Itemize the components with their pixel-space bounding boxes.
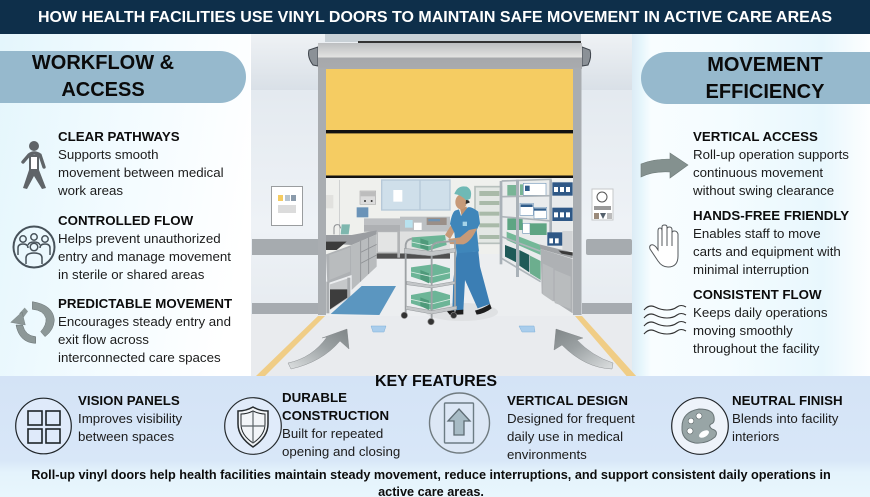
left floor arrow (288, 329, 349, 369)
item: controlled flow: Helps prevent unauthorized (58, 231, 221, 246)
item: vertical access: without swing clearance (693, 183, 834, 198)
item: predictable movement (58, 296, 232, 365)
item: clear pathways (58, 129, 224, 198)
panel: right movement efficiency (632, 34, 870, 376)
item: vertical access (693, 129, 849, 198)
title bar: HOW HEALTH FACILITIES USE VINYL DOORS TO MAINTAIN SAFE MOVEMENT IN ACTIVE CARE AREAS (38, 9, 832, 26)
feature: durable construction: DURABLE (282, 390, 347, 405)
icon: curved right arrow (640, 152, 688, 178)
closing statement (31, 468, 831, 497)
item: consistent flow: CONSISTENT FLOW (693, 287, 822, 302)
feature: neutral finish: NEUTRAL FINISH (732, 393, 843, 408)
icon: flow waves (644, 305, 686, 334)
supply cart with green boxes (401, 235, 457, 325)
title bar (0, 0, 870, 34)
floor shadow (426, 303, 498, 321)
item: predictable movement: PREDICTABLE MOVEMENT (58, 296, 232, 311)
heading: movement efficiency: EFFICIENCY (706, 81, 824, 103)
heading: key features: KEY FEATURES (375, 373, 497, 390)
item: consistent flow: Keeps daily operations (693, 305, 828, 320)
item: consistent flow (693, 287, 828, 356)
item: clear pathways: CLEAR PATHWAYS (58, 129, 180, 144)
feature: vertical design: VERTICAL DESIGN (507, 393, 628, 408)
item: vertical access: VERTICAL ACCESS (693, 129, 818, 144)
heading: workflow and access (0, 51, 246, 103)
feature: vertical design: environments (507, 447, 587, 462)
room wall and floor behind door (326, 178, 573, 316)
heading: movement efficiency: MOVEMENT (707, 54, 823, 76)
heading: workflow and access: ACCESS (61, 79, 145, 101)
feature: durable construction: opening and closing (282, 444, 400, 459)
heading: movement efficiency (641, 52, 870, 104)
panel: key features band (0, 376, 870, 497)
item: hands-free friendly (693, 208, 849, 277)
closing statement: Roll-up vinyl doors help health facilities maintain steady movement, reduce interruptions, and support consistent daily operations in (31, 468, 831, 482)
feature: durable construction (282, 390, 400, 459)
right wall safety sign (592, 189, 613, 220)
item: hands-free friendly: carts and equipment with (693, 244, 841, 259)
feature: vision panels (78, 393, 182, 444)
central illustration: roll-up door in care area (251, 34, 636, 376)
item: vertical access: Roll-up operation supports (693, 147, 849, 162)
feature: neutral finish: interiors (732, 429, 779, 444)
feature: neutral finish (732, 393, 843, 444)
feature: neutral finish: Blends into facility (732, 411, 838, 426)
feature: vision panels: between spaces (78, 429, 174, 444)
item: vertical access: continuous movement (693, 165, 823, 180)
item: hands-free friendly: Enables staff to move (693, 226, 821, 241)
item: clear pathways: Supports smooth (58, 147, 159, 162)
item: hands-free friendly: HANDS-FREE FRIENDLY (693, 208, 849, 223)
item: controlled flow: CONTROLLED FLOW (58, 213, 193, 228)
item: controlled flow: entry and manage movement (58, 249, 231, 264)
feature: durable construction: CONSTRUCTION (282, 408, 389, 423)
icon: cycle arrows (10, 301, 55, 344)
item: controlled flow (58, 213, 231, 282)
panel: left workflow and access (0, 34, 250, 376)
left part of room: window, equipment, cabinets, mat (326, 180, 450, 315)
yellow floor guide lines (256, 316, 637, 380)
item: predictable movement: Encourages steady entry and (58, 314, 231, 329)
left wall poster (272, 186, 302, 226)
item: clear pathways: movement between medical (58, 165, 224, 180)
item: clear pathways: work areas (58, 183, 123, 198)
icon: paint palette (671, 397, 729, 455)
icon: open hand (649, 224, 678, 268)
feature: vision panels: VISION PANELS (78, 393, 180, 408)
right part of room: shelves, supplies, counter (475, 179, 573, 313)
icon: group of people in circle (12, 226, 56, 268)
feature: vertical design (507, 393, 635, 462)
icon: walking person (21, 141, 46, 189)
icon: vision panels (15, 398, 72, 454)
item: predictable movement: exit flow across (58, 332, 149, 347)
heading: workflow and access: WORKFLOW & (32, 52, 174, 74)
icon: shield (224, 397, 282, 455)
nurse pushing cart (445, 186, 492, 315)
icon: vertical upward arrow (428, 392, 490, 454)
feature: durable construction: Built for repeated (282, 426, 383, 441)
item: consistent flow: moving smoothly (693, 323, 793, 338)
feature: vision panels: Improves visibility (78, 411, 182, 426)
item: predictable movement: interconnected care spaces (58, 350, 221, 365)
floor markers (371, 326, 535, 332)
feature: vertical design: Designed for frequent (507, 411, 635, 426)
wall and floor (251, 34, 632, 376)
roll-up door (308, 34, 591, 315)
item: controlled flow: in sterile or shared areas (58, 267, 204, 282)
right floor arrow (554, 329, 613, 369)
item: consistent flow: throughout the facility (693, 341, 819, 356)
feature: vertical design: daily use in medical (507, 429, 623, 444)
item: hands-free friendly: minimal interruption (693, 262, 809, 277)
